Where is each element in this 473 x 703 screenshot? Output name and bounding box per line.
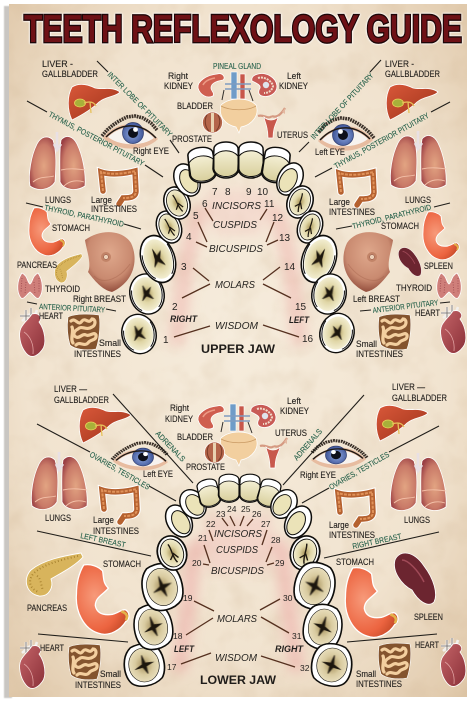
organ labels upper: LUNGS xyxy=(405,195,431,205)
organ: pancreas upper xyxy=(55,254,82,283)
tooth numbers lower: 23 xyxy=(216,509,226,519)
organ: large intestine upper left xyxy=(101,171,136,204)
tooth 22 xyxy=(174,485,212,523)
organ: liver upper left xyxy=(68,84,120,120)
tooth numbers lower: 21 xyxy=(198,533,208,543)
organ labels lower: Small xyxy=(100,669,121,679)
label: anterior pituitary left: ANTERIOR PITUITARY xyxy=(39,302,106,314)
organ labels upper: PANCREAS xyxy=(17,260,57,270)
organ labels lower: INTESTINES xyxy=(93,526,139,536)
organ: lungs lower left xyxy=(31,452,87,509)
organ labels upper: Large xyxy=(329,197,350,207)
tooth 6 xyxy=(168,159,206,201)
tooth 20 xyxy=(153,532,191,574)
organ labels lower: STOMACH xyxy=(103,559,141,569)
tooth type labels upper: LEFT xyxy=(289,315,310,325)
tooth numbers lower: 28 xyxy=(271,535,281,545)
organ labels lower: LUNGS xyxy=(45,513,71,523)
tooth 3 xyxy=(134,231,182,287)
organ: right eye upper xyxy=(102,116,158,149)
organ labels upper: LIVER - xyxy=(42,59,73,69)
panel: upper jaw xyxy=(17,59,466,359)
organ labels upper: THYROID xyxy=(45,284,80,294)
tooth numbers upper: 14 xyxy=(284,262,296,273)
label: adrenals right: ADRENALS xyxy=(292,427,324,462)
organ labels lower: GALLBLADDER xyxy=(54,395,109,405)
organ: prostate upper xyxy=(202,112,222,133)
reflex lines upper xyxy=(26,60,450,311)
tooth type labels lower: LEFT xyxy=(174,644,195,654)
organ labels upper: Right BREAST xyxy=(73,294,126,304)
label: ovaries testicles left: OVARIES, TESTICLES xyxy=(88,450,151,492)
tooth connector lines upper xyxy=(174,208,299,337)
tooth type labels lower: BICUSPIDS xyxy=(211,565,264,577)
tooth 29 xyxy=(286,532,324,574)
tooth 31 xyxy=(299,601,346,653)
organ: stomach upper left xyxy=(29,208,65,256)
tooth 16 xyxy=(315,309,359,357)
organ: thyroid upper left xyxy=(18,273,42,298)
tooth numbers upper xyxy=(163,187,314,346)
organ labels lower: KIDNEY xyxy=(165,414,193,424)
tooth 8 xyxy=(213,142,239,178)
tooth numbers upper: 12 xyxy=(272,213,284,224)
tooth 27 xyxy=(265,485,303,523)
organ: vessels lower xyxy=(221,404,252,433)
organ: small intestine upper left xyxy=(67,314,100,350)
tooth type labels lower: MOLARS xyxy=(217,613,257,625)
tooth numbers lower: 22 xyxy=(206,519,216,529)
organ labels lower: LIVER — xyxy=(54,384,88,394)
organ labels upper: THYROID xyxy=(396,283,432,293)
tooth numbers upper: 11 xyxy=(264,199,275,210)
organ labels lower: INTESTINES xyxy=(356,679,402,689)
organ: small intestine lower left xyxy=(68,644,101,680)
organ labels upper: STOMACH xyxy=(381,221,419,231)
upper teeth arch xyxy=(117,142,359,358)
tooth 7 xyxy=(186,146,218,184)
organ: spleen upper xyxy=(398,248,421,276)
organ labels lower: KIDNEY xyxy=(280,406,309,416)
organ labels upper: Left xyxy=(287,71,301,81)
tooth 10 xyxy=(260,146,292,184)
label: thyroid parathyroid right: THYROID, PARATHYROID xyxy=(351,203,432,231)
tooth type labels upper: MOLARS xyxy=(215,279,255,291)
heading: upper jaw: UPPER JAW xyxy=(201,344,275,356)
organ: heart lower right xyxy=(441,638,466,686)
tooth 4 xyxy=(152,207,186,247)
organ labels upper: KIDNEY xyxy=(164,81,193,91)
organ: left kidney lower xyxy=(251,405,276,427)
tooth numbers upper: 13 xyxy=(279,233,291,244)
tooth numbers upper: 16 xyxy=(302,334,314,345)
organ labels lower: Large xyxy=(93,515,114,525)
organ: bladder upper xyxy=(220,99,257,133)
organ: lungs upper right xyxy=(390,131,446,188)
organ labels upper: GALLBLADDER xyxy=(42,69,98,79)
tooth type labels upper: CUSPIDS xyxy=(213,219,257,231)
organ labels upper: STOMACH xyxy=(52,223,90,233)
organ labels upper: SPLEEN xyxy=(424,261,453,271)
tooth type labels upper xyxy=(170,200,310,332)
organ labels upper: Right xyxy=(168,71,188,81)
tooth 19 xyxy=(137,559,187,614)
tooth connector lines lower xyxy=(181,516,295,667)
tooth numbers upper: 3 xyxy=(181,262,187,273)
organ: large intestine lower left xyxy=(102,489,137,522)
label: inter lobe of pituitary left side: INTER LOBE OF PITUITARY xyxy=(309,70,376,141)
organ labels upper: Small xyxy=(99,338,121,348)
organ labels lower: INTESTINES xyxy=(75,680,121,690)
organ: large intestine upper right xyxy=(339,172,374,205)
tooth 1 xyxy=(117,310,161,358)
tooth numbers lower: 29 xyxy=(275,558,285,568)
tooth numbers lower: 31 xyxy=(292,631,302,641)
tooth type labels lower xyxy=(174,528,304,664)
organ labels lower: Right xyxy=(170,403,189,413)
tooth type labels lower: WISDOM xyxy=(215,652,257,664)
organ: right kidney upper xyxy=(198,74,224,97)
organ labels upper: Large xyxy=(91,195,112,205)
label: thymus posterior pituitary right: THYMUS, POSTERIOR PITUITARY xyxy=(333,111,431,171)
organ labels upper: INTESTINES xyxy=(329,207,375,217)
organ: heart upper right xyxy=(441,305,466,353)
tooth numbers lower: 19 xyxy=(183,593,193,603)
panel: lower jaw xyxy=(20,382,466,690)
organ labels upper: Left EYE xyxy=(315,147,345,157)
organ labels upper xyxy=(17,59,453,359)
tooth numbers upper: 1 xyxy=(163,335,169,346)
organ labels upper: HEART xyxy=(415,308,440,318)
label: adrenals left: ADRENALS xyxy=(154,429,187,463)
organ: stomach lower left xyxy=(76,565,129,634)
reflex lines lower xyxy=(37,394,439,642)
organ labels lower: HEART xyxy=(40,643,64,653)
label: pineal gland: PINEAL GLAND xyxy=(213,62,261,71)
tooth numbers upper: 15 xyxy=(295,302,307,313)
tooth type labels lower: CUSPIDS xyxy=(216,544,258,556)
organ labels upper: HEART xyxy=(39,311,63,321)
tooth 14 xyxy=(295,231,343,287)
tooth type labels upper: WISDOM xyxy=(215,320,258,332)
pink gum shading: upper xyxy=(176,190,300,345)
tooth numbers lower: 18 xyxy=(173,631,183,641)
organ labels lower: HEART xyxy=(415,640,439,650)
organ: left breast xyxy=(343,232,393,292)
organ labels lower: Large xyxy=(329,520,349,530)
tooth 25 xyxy=(239,474,261,502)
tooth 17 xyxy=(121,641,168,689)
organ labels lower: GALLBLADDER xyxy=(392,393,447,403)
organ labels upper: Small xyxy=(356,339,377,349)
tooth type labels lower: RIGHT xyxy=(275,644,304,654)
tooth numbers upper: 8 xyxy=(225,187,231,198)
tooth 5 xyxy=(159,183,195,223)
heading: lower jaw: LOWER JAW xyxy=(200,675,276,687)
tooth numbers lower: 27 xyxy=(261,519,271,529)
organ labels lower: LIVER — xyxy=(392,382,426,392)
organ: heart lower left xyxy=(20,640,45,688)
organ labels lower: PROSTATE xyxy=(186,462,225,472)
organ labels upper: INTESTINES xyxy=(74,349,121,359)
organ: lungs lower right xyxy=(390,453,446,510)
tooth 9 xyxy=(238,142,264,178)
organ labels lower xyxy=(27,382,447,690)
tooth numbers lower: 17 xyxy=(167,662,177,672)
organ: stomach lower right xyxy=(345,568,398,637)
organ: left eye lower xyxy=(112,443,168,470)
tooth numbers upper: 2 xyxy=(172,302,178,313)
organ labels lower: STOMACH xyxy=(336,557,374,567)
organ: liver lower right xyxy=(376,405,428,441)
tooth 26 xyxy=(255,477,283,509)
tooth 30 xyxy=(290,558,340,613)
tooth type labels upper: BICUSPIDS xyxy=(209,243,263,255)
tooth 18 xyxy=(130,601,177,653)
organ: liver upper right xyxy=(386,84,438,120)
organ labels upper: GALLBLADDER xyxy=(385,69,440,79)
organ labels lower: INTESTINES xyxy=(329,530,375,540)
organ labels upper: INTESTINES xyxy=(356,349,403,359)
organ: lungs upper left xyxy=(29,132,85,189)
organ: left kidney upper xyxy=(252,74,277,96)
organ labels lower: Small xyxy=(356,669,376,679)
tooth numbers lower: 25 xyxy=(241,504,251,514)
organ labels upper: INTESTINES xyxy=(91,204,137,214)
organ labels lower: UTERUS xyxy=(275,428,307,438)
tooth 28 xyxy=(279,501,317,543)
tooth 24 xyxy=(218,474,240,502)
organ labels upper: Right EYE xyxy=(133,146,169,156)
tooth 32 xyxy=(308,641,355,689)
organ: vessels upper xyxy=(222,72,253,101)
organ: bladder lower xyxy=(220,432,257,466)
tooth type labels upper: INCISORS xyxy=(212,200,261,212)
tooth numbers upper: 5 xyxy=(193,211,199,222)
organ: stomach upper right xyxy=(423,212,459,260)
label: left breast: LEFT BREAST xyxy=(80,531,127,550)
organ labels upper: Left BREAST xyxy=(353,294,400,304)
green reflex labels upper xyxy=(39,62,439,315)
organ: left eye upper xyxy=(318,118,374,151)
tooth numbers lower: 32 xyxy=(300,663,310,673)
tooth numbers lower: 20 xyxy=(192,558,202,568)
organ labels upper: UTERUS xyxy=(277,130,308,140)
label: anterior pituitary right: ANTERIOR PITUITARY xyxy=(372,298,439,315)
tooth 23 xyxy=(195,477,223,509)
organ: right breast xyxy=(85,232,135,292)
organ: liver lower left xyxy=(79,407,131,443)
organ labels upper: PROSTATE xyxy=(172,134,212,144)
label: thyroid parathyroid left: THYROID, PARATHYROID xyxy=(44,203,125,229)
tooth 21 xyxy=(160,500,198,542)
lower teeth arch xyxy=(121,474,355,689)
organ labels lower: BLADDER xyxy=(177,432,213,442)
label: inter lobe of pituitary right side: INTER LOBE OF PITUITARY xyxy=(106,70,175,139)
organ labels lower: LUNGS xyxy=(404,515,430,525)
organ labels upper: KIDNEY xyxy=(279,81,308,91)
tooth numbers lower: 24 xyxy=(227,504,237,514)
organ: heart upper left xyxy=(20,308,45,356)
label: right breast: RIGHT BREAST xyxy=(352,532,403,551)
organ: uterus upper xyxy=(258,108,285,138)
organ labels upper: BLADDER xyxy=(177,101,213,111)
organ labels lower: Left EYE xyxy=(143,469,173,479)
tooth numbers lower xyxy=(167,504,310,673)
organ: small intestine lower right xyxy=(378,643,411,679)
tooth numbers upper: 10 xyxy=(257,187,269,198)
tooth numbers upper: 4 xyxy=(186,232,192,243)
organ labels lower: PANCREAS xyxy=(27,603,67,613)
organ labels upper: LUNGS xyxy=(45,195,71,205)
tooth numbers lower: 26 xyxy=(252,509,262,519)
organ labels lower: Right EYE xyxy=(300,470,336,480)
green reflex labels lower xyxy=(80,427,403,551)
tooth numbers upper: 7 xyxy=(212,187,218,198)
tooth 15 xyxy=(307,270,351,318)
tooth numbers upper: 9 xyxy=(246,187,252,198)
organ: pancreas lower xyxy=(26,553,83,596)
tooth 13 xyxy=(293,207,327,247)
tooth numbers upper: 6 xyxy=(202,199,208,210)
organ labels upper: LIVER - xyxy=(385,59,414,69)
organ labels lower: Left xyxy=(287,396,301,406)
label: ovaries testicles right: OVARIES, TESTICLES xyxy=(328,450,391,492)
organ: uterus lower xyxy=(260,438,287,468)
tooth numbers lower: 30 xyxy=(283,593,293,603)
organ: thyroid upper right xyxy=(437,273,461,298)
organ: small intestine upper right xyxy=(378,314,411,350)
tooth type labels lower: INCISORS xyxy=(214,528,262,540)
organ: prostate lower xyxy=(204,442,224,463)
tooth 12 xyxy=(282,182,318,222)
organ: right eye lower xyxy=(311,441,367,468)
organ labels lower: SPLEEN xyxy=(414,612,443,622)
tooth 11 xyxy=(271,158,309,200)
organ: large intestine lower right xyxy=(338,492,373,525)
organ: spleen lower xyxy=(394,553,436,604)
pink gum shading: lower xyxy=(179,515,297,672)
organ: right kidney lower xyxy=(198,406,224,429)
label: thymus posterior pituitary left: THYMUS, POSTERIOR PITUITARY xyxy=(47,110,146,168)
tooth type labels upper: RIGHT xyxy=(170,314,198,324)
tooth 2 xyxy=(125,270,169,318)
